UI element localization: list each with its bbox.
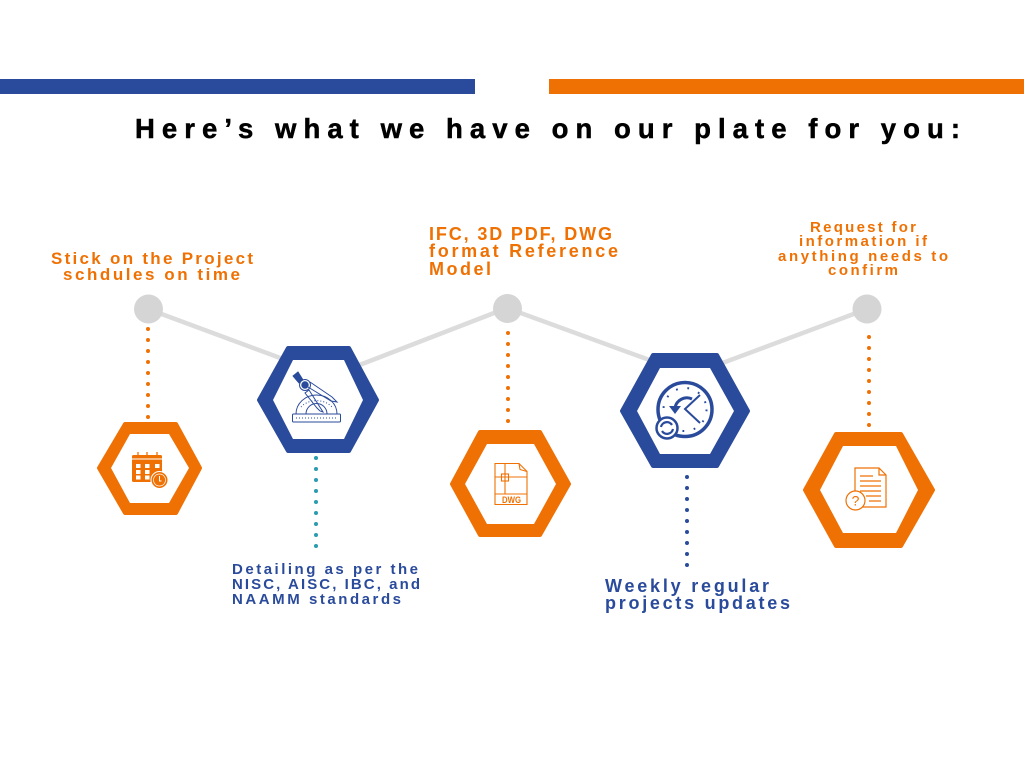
hexagon 4 with clock icon — [622, 355, 748, 466]
label: step 3: IFC, 3D PDF, DWG — [429, 224, 612, 244]
label: step 5: confirm — [828, 262, 898, 279]
label: step 4 — [605, 576, 790, 613]
connector line — [148, 308, 867, 381]
icon: calendar with clock — [132, 452, 168, 488]
label: step 2: NAAMM standards — [232, 591, 401, 608]
label: step 5: anything needs to — [778, 248, 948, 265]
orange header bar — [549, 79, 1024, 94]
label: step 2 — [232, 561, 420, 608]
icon: compass and protractor — [292, 372, 340, 422]
timeline nodes — [134, 294, 882, 324]
label: step 5: information if — [799, 233, 928, 250]
hexagon 5 with document question icon — [805, 434, 933, 546]
title: Here’s what we have on our plate for you: — [135, 113, 960, 144]
label: step 2: Detailing as per the — [232, 561, 418, 578]
icon: DWG file: DWG — [502, 495, 521, 505]
label: step 5: Request for — [810, 219, 916, 236]
blue header bar — [0, 79, 475, 94]
dotted connector: step 3 — [506, 333, 510, 422]
icon: clock with refresh — [656, 382, 712, 438]
label: step 2: NISC, AISC, IBC, and — [232, 576, 420, 593]
label: step 3 — [429, 224, 618, 279]
label: step 3: Model — [429, 259, 491, 279]
label: step 1: Stick on the Project — [51, 249, 253, 268]
hexagon 3 with DWG file icon — [452, 432, 569, 535]
label: step 4: Weekly regular — [605, 576, 769, 596]
label: step 1 — [51, 249, 253, 284]
hexagon 2 with drafting tools icon — [259, 348, 377, 451]
dotted connector: step 5 — [867, 337, 871, 426]
icon: document with question mark: ? — [852, 492, 860, 508]
label: step 1: schdules on time — [63, 265, 240, 284]
label: step 3: format Reference — [429, 241, 618, 261]
label: step 4: projects updates — [605, 593, 790, 613]
hexagon 1 with calendar icon — [99, 424, 200, 513]
dotted connector: step 1 — [146, 329, 150, 418]
label: step 5 — [778, 219, 948, 279]
dotted connector: step 2 — [314, 458, 318, 547]
dotted connector: step 4 — [685, 477, 689, 566]
